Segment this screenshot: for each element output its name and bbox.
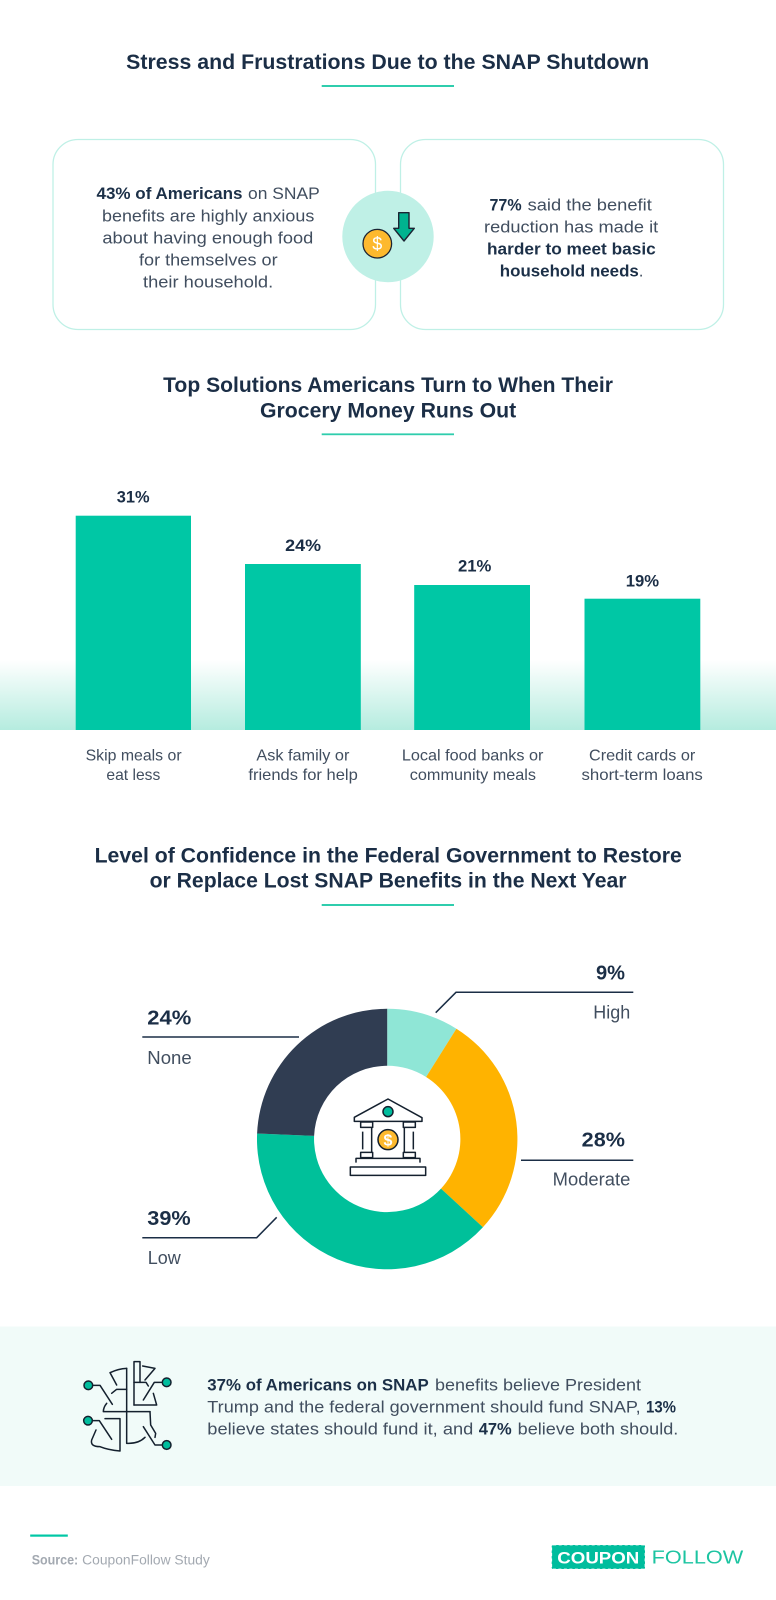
dollar sign on bank icon: $ (384, 1132, 393, 1150)
heading: stress and frustrations: Stress and Frustrations Due to the SNAP Shutdown (126, 51, 649, 74)
heading: top solutions (163, 374, 613, 435)
text: funding statistics (207, 1376, 678, 1439)
callout: low 39% (142, 1208, 277, 1268)
panel: anxious about food card: 43% of Americans (96, 184, 242, 203)
panel: anxious about food card: benefits are highly anxious (102, 206, 314, 225)
panel: basic household needs card (400, 140, 724, 330)
text: funding statistics: 47% (479, 1420, 512, 1439)
segment: high 9% (387, 1009, 456, 1077)
panel: basic household needs card: household needs (500, 261, 639, 280)
bar: credit cards 19%: Credit cards or (589, 748, 696, 765)
heading: level of confidence: Level of Confidence in the Federal Government to Restore (95, 845, 682, 868)
callout: high 9%: 9% (596, 962, 625, 984)
text: funding statistics: believe states should fund it, and (207, 1420, 473, 1439)
panel: basic household needs card: 77% (490, 195, 522, 214)
bar: food banks 21%: Local food banks or (402, 748, 544, 765)
callout: none 24%: None (147, 1048, 192, 1068)
callout: none 24% (142, 1007, 299, 1068)
text: funding statistics: Trump and the federal government should fund SNAP, (207, 1397, 641, 1416)
segment: low 39% (257, 1134, 483, 1269)
icon: coin and down arrow (342, 191, 434, 282)
bar: ask family 24%: 24% (285, 536, 321, 555)
bar: skip meals 31%: eat less (106, 767, 160, 784)
text: funding statistics: 37% of Americans on SNAP (207, 1376, 429, 1395)
icon: bank building (350, 1099, 426, 1175)
panel: anxious about food card: for themselves or (139, 250, 278, 269)
callout: moderate 28%: Moderate (553, 1170, 630, 1190)
panel: basic household needs card: . (639, 261, 644, 280)
source note: Source: (32, 1552, 78, 1567)
segment: none 24% (257, 1009, 387, 1136)
panel: anxious about food card (53, 140, 376, 330)
bar: skip meals 31%: 31% (117, 488, 150, 507)
callout: low 39%: 39% (147, 1208, 191, 1230)
callout: low 39%: Low (148, 1248, 182, 1268)
icon: coin and down arrow: $ (372, 234, 382, 254)
bar: credit cards 19% (582, 572, 703, 784)
panel: who should fund SNAP band (0, 1326, 776, 1486)
text: funding statistics: benefits believe President (435, 1376, 641, 1395)
callout: high 9%: High (593, 1002, 630, 1022)
bar: ask family 24%: Ask family or (256, 748, 350, 765)
text: funding statistics: 13% (646, 1397, 676, 1416)
bar: ask family 24% (245, 536, 361, 784)
logo: CouponFollow (552, 1545, 743, 1569)
panel: basic household needs card: harder to meet basic (487, 239, 656, 258)
text: funding statistics: believe both should. (518, 1420, 678, 1439)
bar: credit cards 19%: short-term loans (582, 767, 703, 784)
callout: moderate 28% (521, 1130, 633, 1190)
panel: basic household needs card: reduction has made it (484, 217, 658, 236)
callout: high 9% (436, 962, 633, 1022)
icon: split circuit map (84, 1362, 171, 1451)
heading: top solutions: Grocery Money Runs Out (260, 400, 516, 423)
bar chart: top solutions (0, 488, 776, 784)
bar: skip meals 31% (76, 488, 191, 784)
bar: ask family 24%: friends for help (248, 767, 358, 784)
panel: anxious about food card: their household. (143, 272, 273, 291)
callout: none 24%: 24% (147, 1007, 192, 1029)
heading: level of confidence: or Replace Lost SNAP Benefits in the Next Year (150, 869, 626, 892)
logo: CouponFollow: COUPON (557, 1548, 639, 1567)
callout: moderate 28%: 28% (582, 1130, 625, 1152)
donut chart: confidence levels (257, 1009, 517, 1269)
panel: anxious about food card: about having enough food (102, 228, 313, 247)
segment: moderate 28% (426, 1029, 517, 1227)
heading: top solutions: Top Solutions Americans Turn to When Their (163, 374, 613, 397)
panel: anxious about food card: on SNAP (248, 184, 320, 203)
bar: skip meals 31%: Skip meals or (86, 748, 182, 765)
panel: basic household needs card: said the benefit (528, 195, 652, 214)
bar: credit cards 19%: 19% (626, 572, 659, 591)
heading: level of confidence (95, 845, 682, 906)
bar: food banks 21%: 21% (458, 557, 491, 576)
bar: food banks 21% (402, 557, 544, 784)
logo: CouponFollow: FOLLOW (652, 1548, 743, 1568)
source note (30, 1534, 210, 1567)
bar: food banks 21%: community meals (410, 767, 536, 784)
source note: CouponFollow Study (82, 1552, 210, 1567)
